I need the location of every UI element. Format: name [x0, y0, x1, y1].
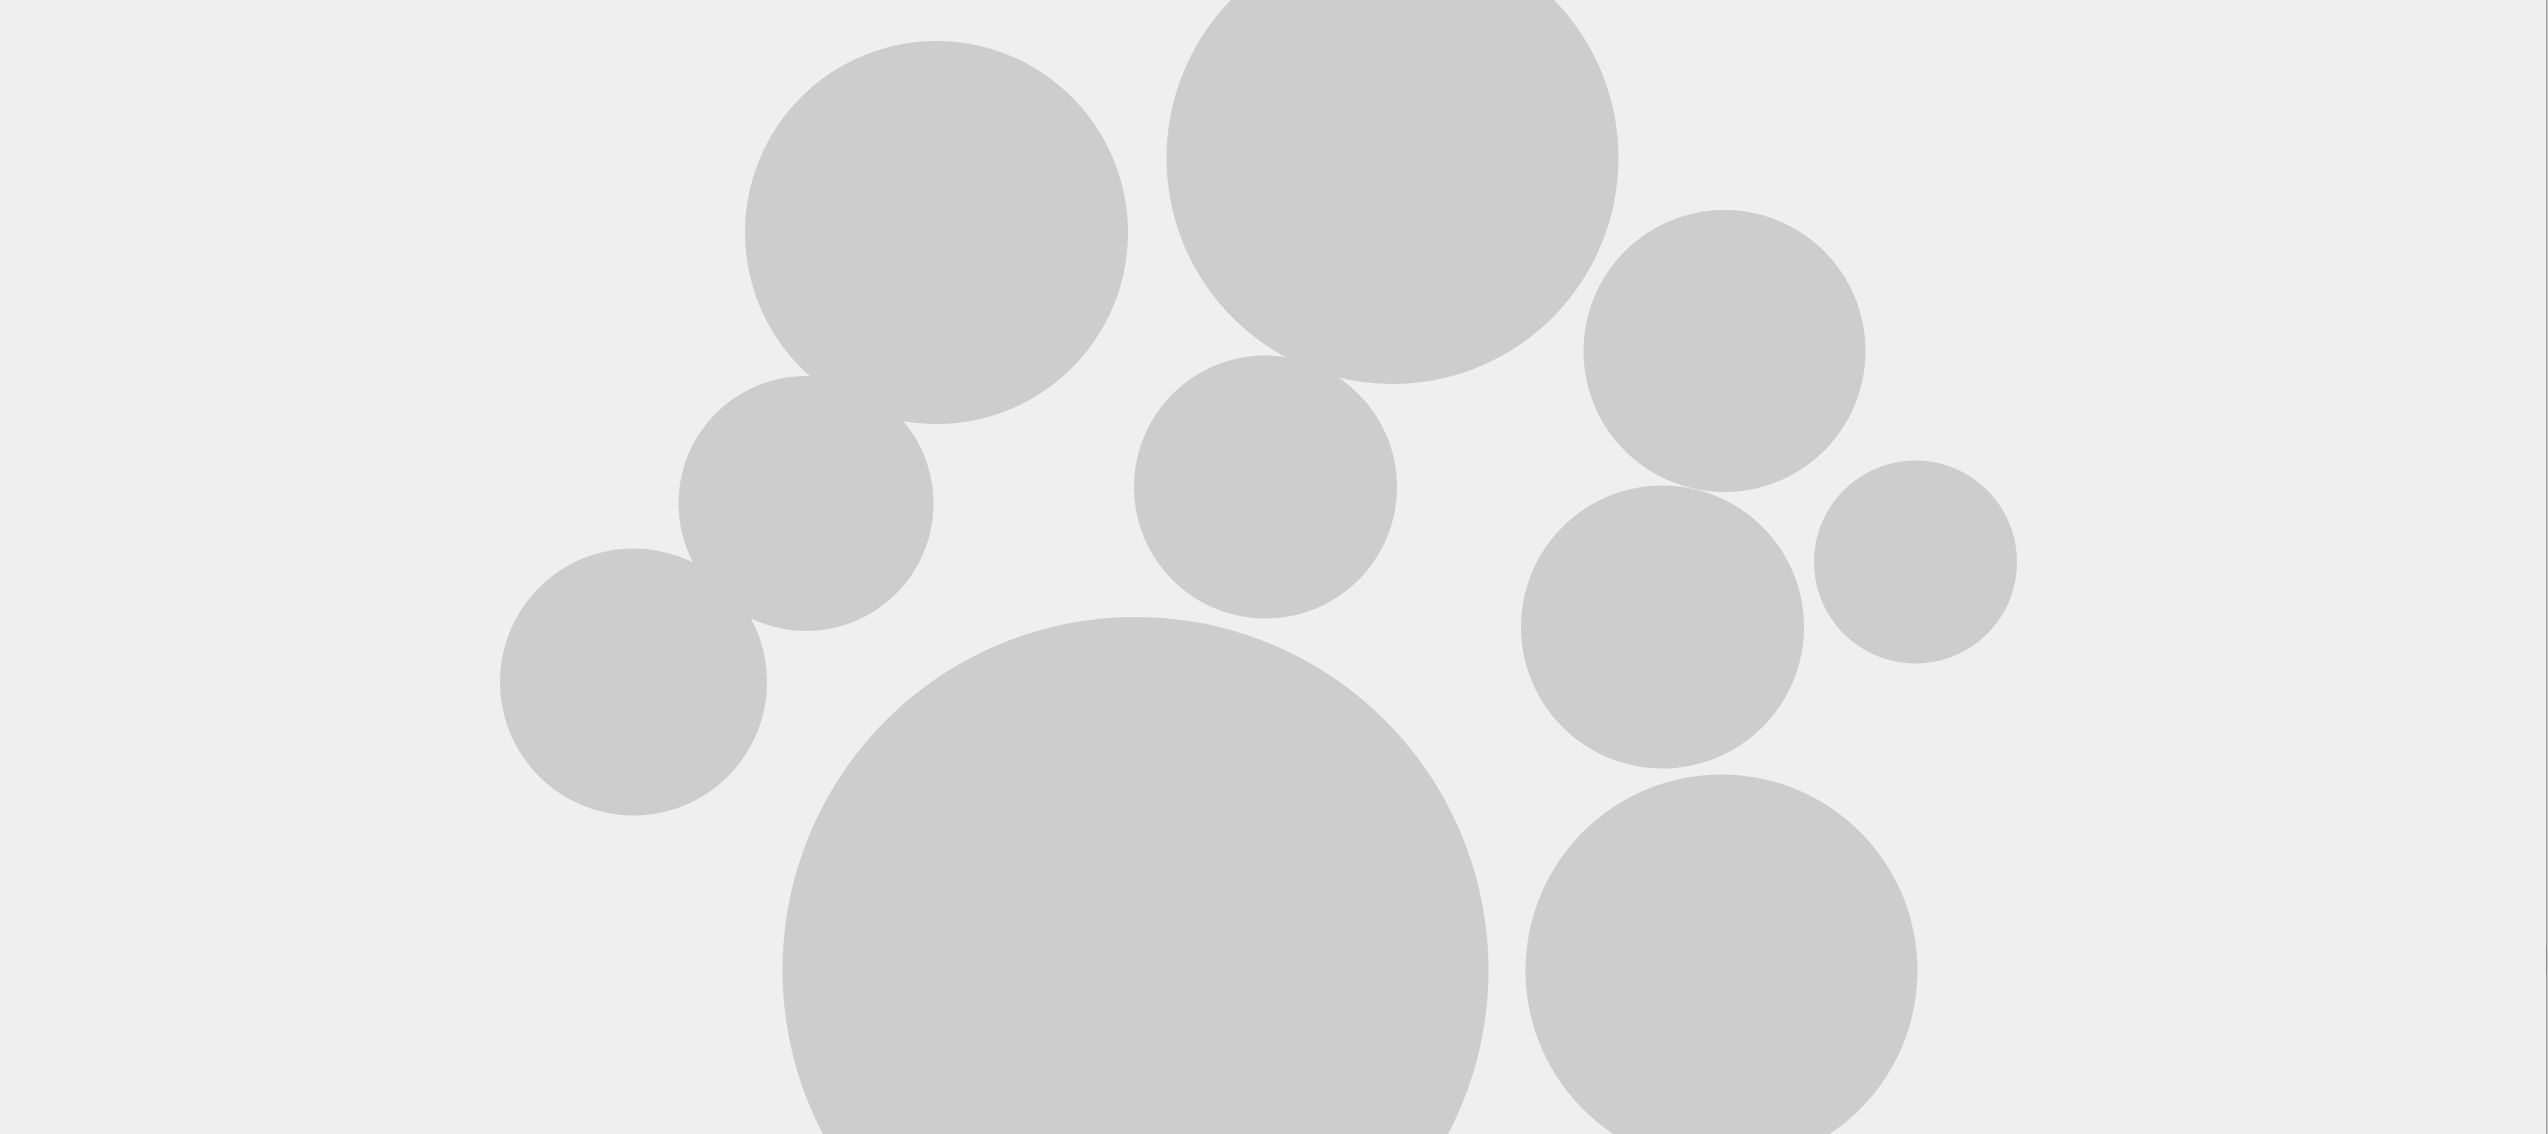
circle: upper left [745, 41, 1128, 424]
circle: lower right [1526, 775, 1917, 1134]
circle: left middle [678, 376, 934, 631]
circle: upper right [1584, 210, 1866, 492]
circle: large bottom [782, 617, 1488, 1134]
circle: far left [500, 548, 767, 816]
circle: centre [1134, 356, 1397, 618]
right edge line [2546, 0, 2548, 1134]
circle: top centre [1166, 0, 1618, 384]
circle: far right [1814, 460, 2017, 664]
circle: right middle [1521, 486, 1804, 768]
circle group [500, 0, 2017, 1134]
